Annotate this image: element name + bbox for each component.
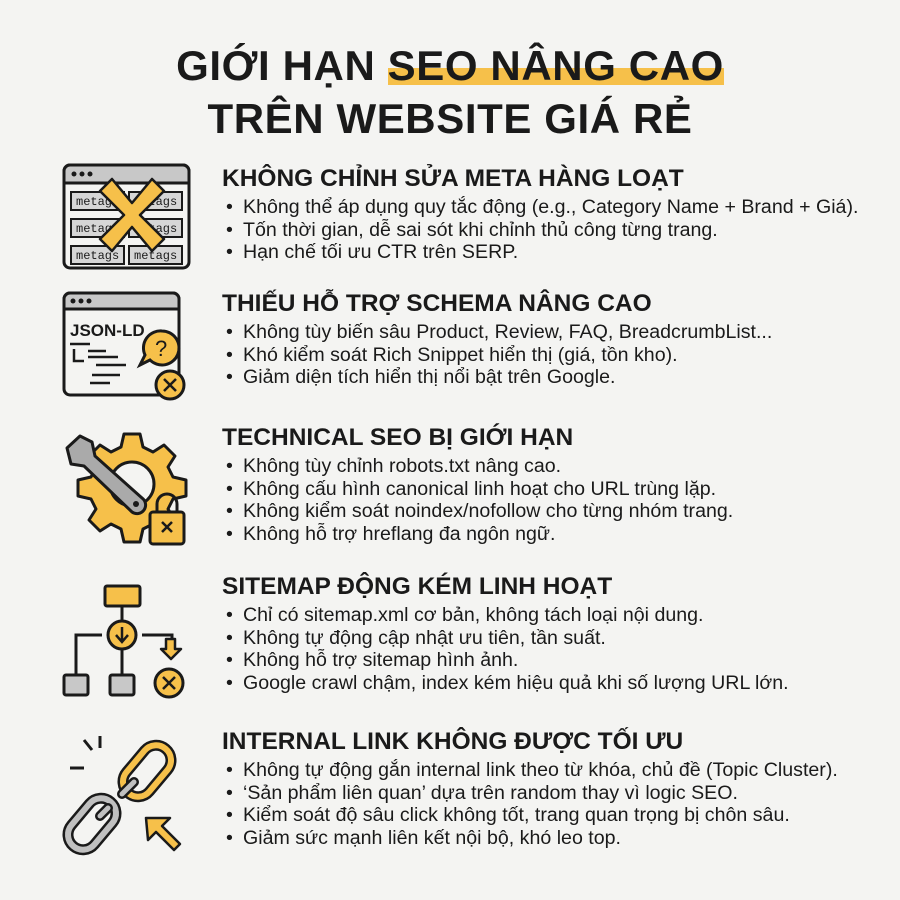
icon: meta tags browser with X [62, 164, 190, 270]
section: schema: Khó kiểm soát Rich Snippet hiển thị (giá, tồn kho). [243, 344, 678, 366]
section: internal link: ‘Sản phẩm liên quan’ dựa trên random thay vì logic SEO. [243, 782, 738, 804]
section: sitemap: SITEMAP ĐỘNG KÉM LINH HOẠT [222, 573, 612, 600]
section: meta: Không thể áp dụng quy tắc động (e.g., Category Name + Brand + Giá). [243, 196, 858, 218]
section: internal link [222, 727, 838, 848]
section: meta: Hạn chế tối ưu CTR trên SERP. [243, 241, 518, 263]
title: TRÊN WEBSITE GIÁ RẺ [207, 95, 693, 142]
section: meta [222, 164, 858, 263]
icon: JSON-LD window: ? [155, 336, 167, 361]
icon: JSON-LD window [62, 292, 186, 400]
section: sitemap: Không tự động cập nhật ưu tiên, tần suất. [243, 626, 606, 648]
section: meta: Tốn thời gian, dễ sai sót khi chỉnh thủ công từng trang. [243, 218, 718, 240]
section: technical: Không cấu hình canonical linh hoạt cho URL trùng lặp. [243, 478, 716, 500]
icon: meta tags browser with X: metags [76, 249, 119, 263]
section: technical [222, 423, 733, 544]
icon: meta tags browser with X: metags [134, 195, 177, 209]
icon: meta tags browser with X: metags [76, 195, 119, 209]
section: sitemap: Không hỗ trợ sitemap hình ảnh. [243, 649, 518, 671]
section: sitemap [222, 572, 789, 694]
icon: broken chain link [62, 736, 182, 856]
section: internal link: Không tự động gắn internal link theo từ khóa, chủ đề (Topic Cluster). [243, 759, 838, 781]
icon: gear wrench lock [66, 432, 188, 546]
section: sitemap: Chỉ có sitemap.xml cơ bản, không tách loại nội dung. [243, 604, 704, 626]
section: schema [222, 289, 772, 388]
section: internal link: INTERNAL LINK KHÔNG ĐƯỢC TỐI ƯU [222, 728, 683, 755]
icon: meta tags browser with X: metags [134, 249, 177, 263]
section: internal link: Giảm sức mạnh liên kết nội bộ, khó leo top. [243, 826, 621, 848]
title: GIỚI HẠN SEO NÂNG CAO [176, 42, 724, 89]
icon: meta tags browser with X: metags [134, 222, 177, 236]
section: schema: THIẾU HỖ TRỢ SCHEMA NÂNG CAO [222, 290, 652, 317]
title [176, 42, 724, 142]
section: technical: Không kiểm soát noindex/nofollow cho từng nhóm trang. [243, 500, 733, 522]
icon: sitemap tree [62, 584, 184, 698]
section: schema: Giảm diện tích hiển thị nổi bật trên Google. [243, 366, 616, 388]
section: sitemap: Google crawl chậm, index kém hiệu quả khi số lượng URL lớn. [243, 672, 789, 694]
section: technical: Không tùy chỉnh robots.txt nâng cao. [243, 455, 561, 477]
section: technical: Không hỗ trợ hreflang đa ngôn ngữ. [243, 522, 555, 544]
icon: meta tags browser with X: metags [76, 222, 119, 236]
icon: JSON-LD window: JSON-LD [70, 321, 145, 340]
section: internal link: Kiểm soát độ sâu click không tốt, trang quan trọng bị chôn sâu. [243, 804, 790, 826]
section: meta: KHÔNG CHỈNH SỬA META HÀNG LOẠT [222, 165, 684, 192]
section: schema: Không tùy biến sâu Product, Review, FAQ, BreadcrumbList... [243, 321, 772, 343]
section: technical: TECHNICAL SEO BỊ GIỚI HẠN [222, 424, 573, 451]
